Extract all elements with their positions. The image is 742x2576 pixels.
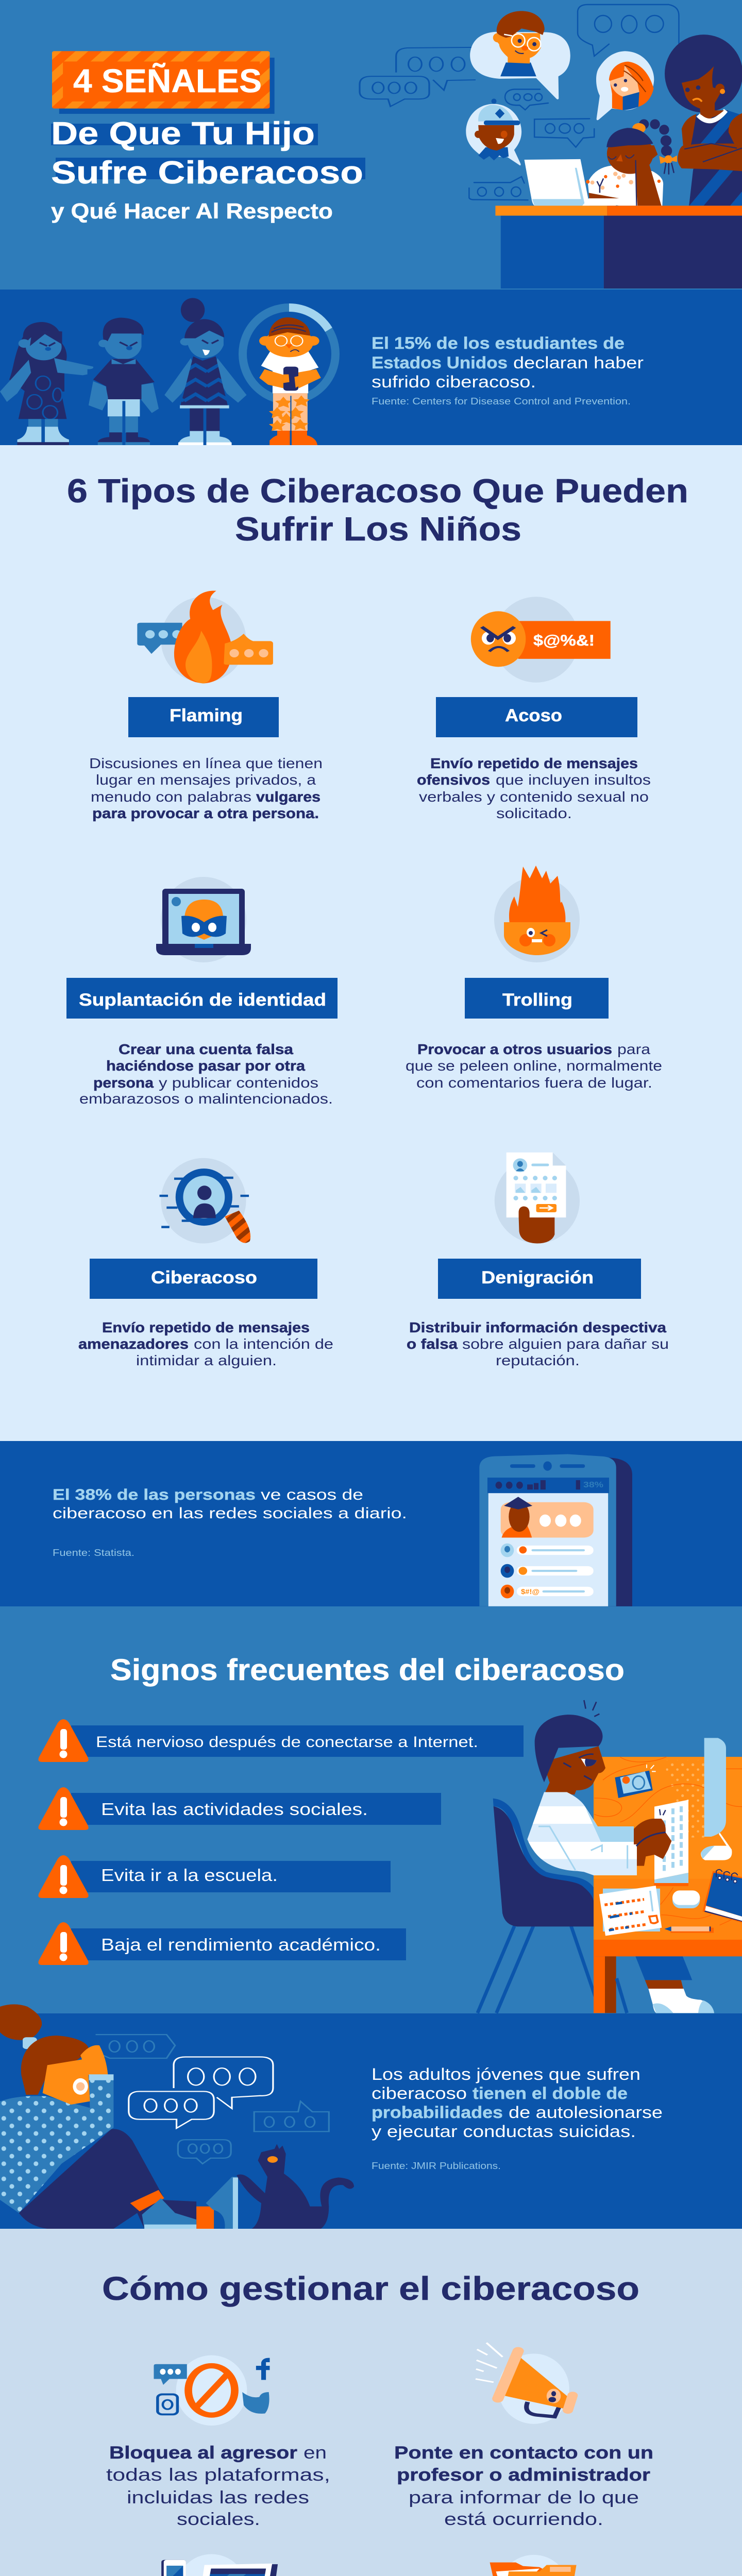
item: pencil bbox=[664, 1926, 714, 1933]
label: denigración bbox=[438, 1259, 641, 1299]
figure: sad girl bbox=[0, 2004, 238, 2229]
text: ciberacoso description: Envío repetido de mensajes bbox=[102, 1319, 310, 1335]
heading: six types bbox=[67, 472, 688, 548]
icon: laptop with masked impostor bbox=[156, 877, 251, 962]
figure: capped boy avatar bbox=[466, 98, 521, 165]
badge: 4 señales hazard banner: 4 SEÑALES bbox=[73, 62, 262, 99]
furniture: orange desk bbox=[594, 1757, 742, 2013]
item: lower academic performance: Baja el rendimiento académico. bbox=[101, 1935, 381, 1954]
icon: angry face with swear bar bbox=[471, 597, 611, 683]
item: phone on desk bbox=[615, 1765, 656, 1798]
heading: six types: Sufrir Los Niños bbox=[235, 510, 521, 548]
figure: mother with arms crossed bbox=[665, 35, 742, 206]
furniture: chair legs bbox=[478, 1926, 596, 2013]
illustration: left speech bubble outlines bbox=[360, 47, 476, 107]
text: trolling description bbox=[406, 1041, 662, 1091]
icon: phone and laptop bbox=[161, 2554, 278, 2576]
text: ciberacoso description: con la intención de bbox=[194, 1336, 333, 1352]
figure: sad child with phone bbox=[259, 317, 321, 445]
panel: young adults statistic band bbox=[0, 2013, 742, 2229]
text: acoso description bbox=[417, 755, 651, 821]
item: avoids social activities bbox=[38, 1787, 441, 1830]
label: trolling bbox=[465, 978, 609, 1019]
text: young adults statistic: probabilidades bbox=[372, 2103, 503, 2122]
label: suplantación de identidad: Suplantación de identidad bbox=[79, 990, 326, 1010]
label: denigración: Denigración bbox=[481, 1268, 594, 1287]
text: young adults statistic: Fuente: JMIR Publications. bbox=[372, 2161, 501, 2171]
panel: six types section bbox=[0, 445, 742, 1441]
label: suplantación de identidad bbox=[66, 978, 338, 1019]
text: denigración description: o falsa bbox=[407, 1336, 458, 1352]
text: flaming description: lugar en mensajes privados, a bbox=[96, 772, 316, 788]
text: contact a teacher: profesor o administrador bbox=[397, 2465, 650, 2485]
label: acoso bbox=[436, 697, 637, 737]
text: denigración description: Distribuir información despectiva bbox=[409, 1319, 666, 1335]
item: avoids school bbox=[38, 1855, 391, 1898]
figure: sad child at laptop bbox=[524, 119, 677, 206]
text: young adults statistic bbox=[372, 2065, 663, 2171]
text: young adults statistic: Los adultos jóvenes que sufren bbox=[372, 2065, 640, 2083]
text: block the aggressor: sociales. bbox=[177, 2510, 260, 2529]
title: main heading lines: Sufre Ciberacoso bbox=[51, 155, 363, 191]
figure: boy avatar bbox=[470, 11, 570, 99]
figure: boy in navy shirt bbox=[89, 318, 159, 445]
text: block the aggressor: todas las plataformas, bbox=[106, 2465, 330, 2485]
title: main heading lines bbox=[51, 116, 365, 223]
figure: pointing girl bbox=[0, 322, 93, 445]
label: flaming: Flaming bbox=[170, 706, 243, 725]
furniture: chair bbox=[493, 1799, 594, 1926]
text: block the aggressor: incluidas las redes bbox=[127, 2488, 309, 2507]
text: contact a teacher: Ponte en contacto con un bbox=[394, 2443, 653, 2463]
text: 15% statistic: Estados Unidos bbox=[372, 353, 508, 372]
text: 38% statistic: ciberacoso en las redes sociales a diario. bbox=[53, 1505, 407, 1522]
text: denigración description: sobre alguien para dañar su bbox=[462, 1336, 669, 1352]
text: suplantación description: haciéndose pasar por otra bbox=[106, 1058, 305, 1074]
label: acoso: Acoso bbox=[505, 706, 562, 725]
text: block the aggressor: Bloquea al agresor bbox=[109, 2443, 297, 2463]
label: flaming bbox=[128, 697, 279, 737]
text: suplantación description: y publicar contenidos bbox=[159, 1075, 318, 1091]
badge: 4 señales hazard banner bbox=[52, 51, 275, 114]
illustration: characters, laptop and desk bbox=[466, 5, 742, 289]
panel: frequent signs section bbox=[0, 1606, 742, 2013]
illustration: phone with social feed bbox=[479, 1454, 632, 1606]
text: block the aggressor bbox=[106, 2443, 330, 2529]
text: acoso description: verbales y contenido sexual no bbox=[419, 789, 649, 805]
icon: block on social platforms bbox=[154, 2355, 269, 2426]
text: young adults statistic: y ejecutar conductas suicidas. bbox=[372, 2122, 636, 2141]
heading: frequent signs: Signos frecuentes del ciberacoso bbox=[110, 1653, 625, 1687]
text: 38% statistic bbox=[53, 1486, 407, 1558]
text: young adults statistic: de autolesionarse bbox=[509, 2103, 663, 2122]
item: lower academic performance bbox=[38, 1922, 406, 1965]
icon: angry face with swear bar: $@%&! bbox=[533, 632, 595, 649]
text: flaming description: menudo con palabras bbox=[91, 789, 251, 805]
text: flaming description: para provocar a otra persona. bbox=[92, 805, 319, 821]
heading: six types: 6 Tipos de Ciberacoso Que Pueden bbox=[67, 472, 688, 510]
text: 38% statistic: El 38% de las personas bbox=[53, 1486, 256, 1503]
illustration: sad girl, bubbles and cat bbox=[0, 2004, 354, 2229]
item: notebook bbox=[702, 1870, 742, 1923]
icon: chat bubble outlines bbox=[96, 2035, 329, 2164]
text: 15% statistic: sufrido ciberacoso. bbox=[372, 372, 536, 391]
text: ciberacoso description: amenazadores bbox=[78, 1336, 189, 1352]
label: ciberacoso: Ciberacoso bbox=[151, 1268, 257, 1287]
label: trolling: Trolling bbox=[502, 990, 572, 1010]
text: contact a teacher: para informar de lo que bbox=[409, 2488, 639, 2507]
item: avoids social activities: Evita las actividades sociales. bbox=[101, 1800, 368, 1819]
text: acoso description: ofensivos bbox=[417, 772, 490, 788]
title: main heading lines: y Qué Hacer Al Respecto bbox=[51, 199, 333, 223]
text: 38% statistic: ve casos de bbox=[261, 1486, 363, 1503]
icon: document with pointing hand bbox=[495, 1153, 580, 1244]
item: nervous after going online: Está nervioso después de conectarse a Internet. bbox=[96, 1734, 478, 1751]
figure: girl avatar bbox=[596, 51, 654, 120]
text: trolling description: que se peleen online, normalmente bbox=[406, 1058, 662, 1074]
text: acoso description: que incluyen insultos bbox=[496, 772, 651, 788]
icon: 15% progress ring bbox=[243, 308, 335, 400]
item: monitor bbox=[701, 1738, 732, 1860]
item: calendar sheet bbox=[599, 1886, 662, 1936]
text: block the aggressor: en bbox=[303, 2443, 327, 2463]
item: mouse bbox=[672, 1890, 700, 1908]
label: ciberacoso bbox=[90, 1259, 317, 1299]
text: suplantación description: embarazosos o malintencionados. bbox=[79, 1091, 333, 1107]
text: flaming description bbox=[89, 755, 323, 821]
item: keyboard bbox=[654, 1800, 688, 1886]
figure: black cat bbox=[237, 2144, 354, 2229]
icon: megaphone bbox=[476, 2343, 572, 2424]
panel: hero background bbox=[0, 0, 742, 290]
text: suplantación description: persona bbox=[93, 1075, 154, 1091]
icon: orange folder bbox=[490, 2555, 577, 2576]
panel: how to manage section bbox=[0, 2229, 742, 2576]
text: 15% statistic: declaran haber bbox=[513, 353, 644, 372]
text: flaming description: Discusiones en línea que tienen bbox=[89, 755, 323, 771]
text: ciberacoso description bbox=[78, 1319, 333, 1368]
text: suplantación description bbox=[79, 1041, 333, 1107]
text: trolling description: para bbox=[617, 1041, 650, 1057]
list: warning signs bbox=[38, 1719, 524, 1965]
heading: how to manage: Cómo gestionar el ciberacoso bbox=[102, 2270, 639, 2307]
text: young adults statistic: ciberacoso bbox=[372, 2084, 467, 2103]
text: young adults statistic: tienen el doble de bbox=[473, 2084, 628, 2103]
text: 15% statistic bbox=[372, 334, 644, 406]
icon: troll with flaming hair bbox=[494, 866, 580, 962]
text: suplantación description: Crear una cuenta falsa bbox=[119, 1041, 293, 1057]
text: 15% statistic: El 15% de los estudiantes de bbox=[372, 334, 625, 352]
text: 15% statistic: Fuente: Centers for Disease Control and Prevention. bbox=[372, 396, 631, 406]
icon: speech bubble outlines bbox=[469, 5, 679, 200]
figure: girl with bun bbox=[164, 298, 247, 445]
figure: worried boy bbox=[526, 1700, 671, 1877]
text: contact a teacher: está ocurriendo. bbox=[444, 2510, 603, 2529]
illustration: phone with social feed: $#!@ bbox=[521, 1587, 539, 1596]
text: trolling description: Provocar a otros usuarios bbox=[417, 1041, 612, 1057]
item: avoids school: Evita ir a la escuela. bbox=[101, 1866, 278, 1885]
icon: magnifying glass over person bbox=[160, 1158, 250, 1244]
text: 38% statistic: Fuente: Statista. bbox=[53, 1548, 134, 1558]
text: trolling description: con comentarios fuera de lugar. bbox=[416, 1075, 652, 1091]
text: acoso description: Envío repetido de mensajes bbox=[430, 755, 638, 771]
panel: 15% statistic band bbox=[0, 290, 742, 445]
title: main heading lines: De Que Tu Hijo bbox=[51, 116, 315, 151]
illustration: bystander kids bbox=[0, 298, 247, 445]
furniture: desk bbox=[495, 206, 742, 289]
item: nervous after going online bbox=[38, 1719, 524, 1762]
text: denigración description: reputación. bbox=[496, 1352, 580, 1368]
figure: legs and sock bbox=[635, 1956, 714, 2013]
text: ciberacoso description: intimidar a alguien. bbox=[136, 1352, 277, 1368]
text: flaming description: vulgares bbox=[256, 789, 321, 805]
illustration: phone with social feed: 38% bbox=[583, 1481, 603, 1489]
text: contact a teacher bbox=[394, 2443, 653, 2529]
illustration: worried boy at computer desk bbox=[478, 1700, 742, 2013]
icon: flaming fire with chat bubbles bbox=[137, 591, 273, 683]
panel: 38% statistic band bbox=[0, 1441, 742, 1606]
text: denigración description bbox=[407, 1319, 669, 1368]
text: acoso description: solicitado. bbox=[496, 805, 572, 821]
